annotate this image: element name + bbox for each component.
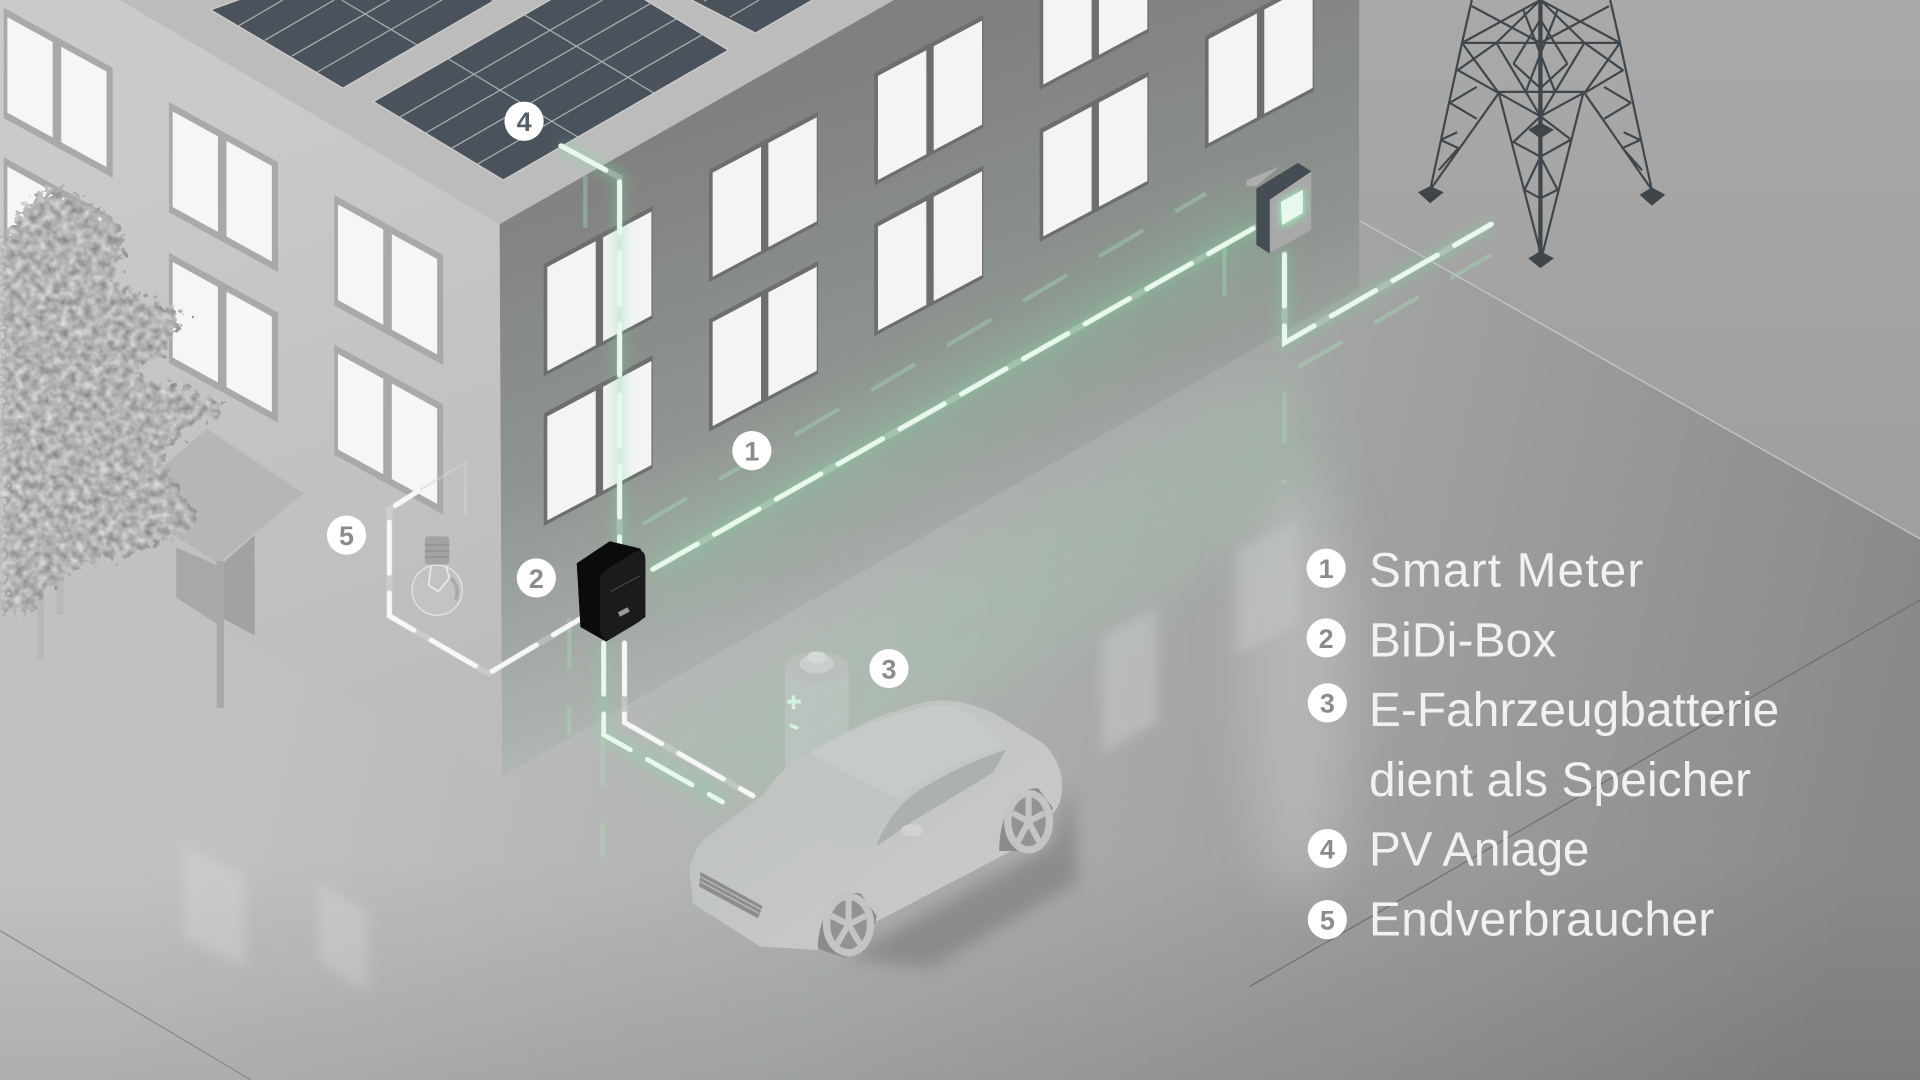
front wheel <box>823 893 874 956</box>
badge 5: 5 <box>339 521 354 551</box>
badge 5 <box>327 516 366 555</box>
solar panel centre <box>373 0 729 180</box>
floor green tint along wall <box>612 355 1335 833</box>
car shadow <box>845 784 1078 967</box>
energy line: BiDi-Box to consumer <box>389 463 598 673</box>
building right wall <box>500 0 1359 776</box>
side windows <box>877 749 1007 846</box>
BiDi-Box <box>577 541 645 642</box>
canopy <box>122 429 304 708</box>
rear wheel <box>1004 790 1053 853</box>
energy line: PV to BiDi-Box <box>561 146 620 549</box>
mirror <box>901 824 923 836</box>
solar panels <box>211 0 817 180</box>
legend item 2: BiDi-Box <box>1369 614 1556 667</box>
windscreen <box>763 753 896 850</box>
legend item 4: PV Anlage <box>1369 824 1589 877</box>
foliage <box>0 187 227 617</box>
legend item 3 <box>1308 683 1779 807</box>
transmission tower <box>1418 0 1665 268</box>
legend item 2: 2 <box>1319 624 1334 654</box>
legend item 3: E-Fahrzeugbatterie <box>1369 684 1779 737</box>
badge 2: 2 <box>529 564 544 594</box>
legend item 3: dient als Speicher <box>1369 754 1751 807</box>
badge 3: 3 <box>881 654 896 684</box>
windows left wall <box>4 8 443 515</box>
energy line: meter to grid <box>1284 224 1491 343</box>
energy line: grid to BiDi-Box <box>653 220 1267 569</box>
solar panel left <box>211 0 500 88</box>
roof <box>120 0 894 224</box>
legend item 4: 4 <box>1320 834 1335 864</box>
grille <box>699 872 763 918</box>
legend item 5: 5 <box>1320 905 1335 935</box>
smart meter box <box>1247 163 1311 253</box>
car <box>689 700 1062 958</box>
badge 1: 1 <box>744 436 759 466</box>
legend item 5: Endverbraucher <box>1369 894 1714 947</box>
tree <box>0 187 227 660</box>
badge 3 <box>869 649 909 688</box>
roof <box>809 705 1004 798</box>
battery plus and minus <box>787 696 801 729</box>
badge 2 <box>517 558 556 598</box>
legend item 1: 1 <box>1319 554 1334 584</box>
badge 4: 4 <box>517 107 532 137</box>
icon: light bulb <box>412 536 462 615</box>
windows right wall <box>544 0 1314 526</box>
floor reflections <box>184 520 1298 992</box>
parking lot floor <box>0 220 1920 1080</box>
wheel arches <box>818 788 1053 958</box>
legend <box>1307 545 1779 947</box>
wall glow <box>637 184 1273 612</box>
wide light on floor <box>1243 478 1353 894</box>
badge 1 <box>732 431 771 470</box>
trunks <box>37 576 64 660</box>
legend item 3: 3 <box>1320 689 1335 719</box>
battery <box>785 651 849 771</box>
energy line: BiDi-Box to car <box>604 643 753 802</box>
solar panel right <box>687 0 817 33</box>
building left wall <box>0 0 502 776</box>
badge 4 <box>504 102 544 141</box>
floor bottom shade <box>0 857 1920 1080</box>
tower feet <box>1418 122 1665 268</box>
legend item 1: Smart Meter <box>1369 545 1643 598</box>
wall reflections of the cable <box>569 176 1491 857</box>
floor edge lines <box>0 220 1920 1080</box>
